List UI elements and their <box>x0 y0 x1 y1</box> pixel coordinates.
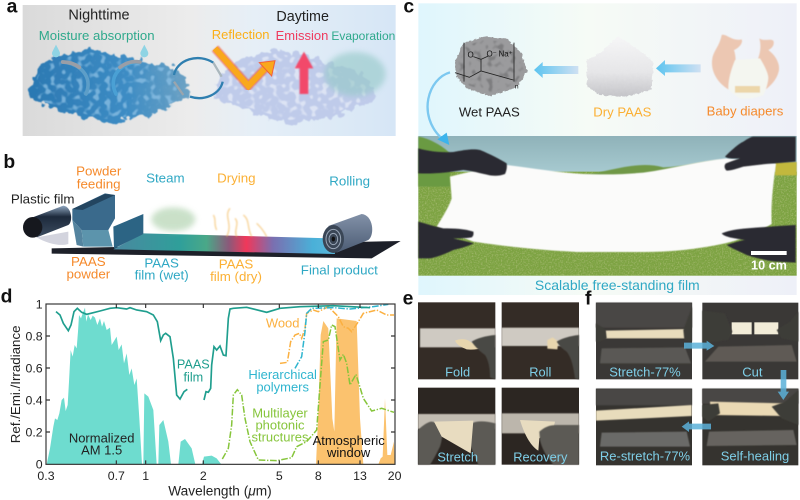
y axis labels: 0.6 <box>26 361 43 375</box>
panel letter f: f <box>585 289 592 310</box>
photo: self-healing <box>702 389 798 465</box>
photo: fold <box>418 302 495 380</box>
arrow: cut to self-healing <box>778 370 789 400</box>
label: hierarchical polymers: polymers <box>256 379 310 394</box>
panel f: self-healing demos <box>585 289 798 465</box>
white dry porous film <box>213 49 378 124</box>
icon: water drops <box>52 45 148 57</box>
label: final product: Final product <box>301 263 378 278</box>
blue wet porous film <box>29 48 191 123</box>
x axis labels: 8 <box>315 469 322 483</box>
y axis labels: 0.2 <box>26 425 43 439</box>
panel letter b: b <box>3 152 15 173</box>
curve: multilayer photonic structures <box>222 325 394 461</box>
scale bar <box>751 251 787 255</box>
icon: final roll <box>323 214 372 253</box>
photo: roll <box>502 302 579 380</box>
label: scalable film: Scalable free-standing film <box>535 277 700 293</box>
label: plastic film: Plastic film <box>11 191 75 206</box>
y axis labels: 0.4 <box>26 393 43 407</box>
photo: cut <box>702 303 798 380</box>
conveyor belt <box>52 241 401 258</box>
icon: wet PAAS with chemical structure: O <box>468 51 474 60</box>
label: PAAS film: PAAS <box>177 358 210 372</box>
label: moisture absorption: Moisture absorption <box>39 28 155 43</box>
panel e: mechanical demos <box>403 289 579 465</box>
x axis labels: 1 <box>142 469 149 483</box>
icon: powder hopper <box>72 193 115 247</box>
y axis labels <box>26 297 43 471</box>
panel a: moisture cycle <box>7 0 396 136</box>
arrows: moisture absorption <box>63 62 140 94</box>
label: normalized AM 1.5: Normalized <box>69 431 135 446</box>
photo: free-standing film <box>418 136 797 293</box>
label: dry PAAS: Dry PAAS <box>593 104 652 119</box>
label: steam: Steam <box>146 171 185 186</box>
label: wood: Wood <box>266 316 300 331</box>
photo: re-stretch 77% <box>596 389 692 465</box>
label: PAAS film dry: film (dry) <box>210 269 262 284</box>
heading: Nighttime: Nighttime <box>68 7 130 23</box>
icon: dry PAAS powder <box>587 36 653 97</box>
icon: plastic film roll <box>23 206 71 245</box>
arrow: self-healing to re-stretch <box>682 421 711 432</box>
arrow: reflection <box>215 48 275 86</box>
AM 1.5 solar spectrum <box>47 308 221 464</box>
atmospheric window fill <box>316 318 395 464</box>
x axis labels: 20 <box>388 469 402 483</box>
photo: stretch 77% <box>596 303 692 380</box>
x axis labels: 13 <box>353 469 367 483</box>
label: PAAS film wet: film (wet) <box>135 268 189 283</box>
arrow: dry to wet <box>534 62 578 78</box>
arrow: diapers to dry <box>656 60 701 76</box>
curve: hierarchical polymers <box>295 304 388 368</box>
divider wall <box>113 214 143 249</box>
curve: wood <box>280 307 394 363</box>
photo: recovery <box>502 388 579 465</box>
photo: self-healing: Self-healing <box>721 449 789 464</box>
panel d: spectral chart <box>1 286 402 499</box>
panel letter e: e <box>403 289 414 310</box>
label: normalized AM 1.5: AM 1.5 <box>81 443 122 458</box>
label: reflection: Reflection <box>212 27 270 42</box>
x axis labels: 5 <box>276 469 283 483</box>
label: PAAS powder: powder <box>66 266 111 281</box>
scale label: 10 cm <box>751 258 787 272</box>
y axis title: Ref./Emi./Irradiance <box>8 325 23 443</box>
panel b: roll-to-roll process <box>3 152 401 284</box>
label: multilayer photonic structures: Multilayer <box>252 406 308 421</box>
heading: Daytime: Daytime <box>276 9 329 25</box>
photo: stretch: Stretch <box>437 450 478 465</box>
panel c background <box>418 3 797 295</box>
label: powder feeding: feeding <box>77 176 121 191</box>
photo: roll: Roll <box>529 365 551 380</box>
label: PAAS film dry: PAAS <box>219 257 253 272</box>
photo: recovery: Recovery <box>513 450 568 465</box>
label: multilayer photonic structures: photonic <box>255 418 305 433</box>
icon: baby in diaper <box>712 35 779 99</box>
label: evaporation: Evaporation <box>331 29 395 43</box>
photo: re-stretch 77%: Re-stretch-77% <box>600 449 691 464</box>
drying wisps <box>213 208 267 237</box>
chart axes <box>46 304 395 464</box>
icon: wet PAAS with chemical structure <box>455 37 527 96</box>
label: PAAS powder: PAAS <box>71 254 106 269</box>
photo: cut: Cut <box>742 365 763 380</box>
curve: PAAS film <box>56 306 370 400</box>
label: hierarchical polymers: Hierarchical <box>248 367 317 382</box>
film gradient strip <box>113 233 335 254</box>
x axis labels <box>37 469 402 483</box>
panel letter d: d <box>1 286 12 307</box>
y axis labels: 0 <box>36 457 43 471</box>
arrow: curved wet PAAS to film <box>428 72 450 145</box>
evaporation haze <box>324 52 386 96</box>
x axis labels: 0.3 <box>37 469 55 483</box>
label: emission: Emission <box>276 28 328 43</box>
icon: wet PAAS with chemical structure: Na⁺ <box>498 50 513 59</box>
label: PAAS film wet: PAAS <box>144 255 179 270</box>
white film sheet <box>437 158 776 252</box>
steam cloud <box>151 207 195 231</box>
label: wet PAAS: Wet PAAS <box>459 104 520 119</box>
x axis labels: 2 <box>200 469 207 483</box>
y axis labels: 1 <box>36 297 43 311</box>
label: atmospheric window: Atmospheric <box>313 433 385 448</box>
arrow: emission <box>295 52 313 94</box>
label: atmospheric window: window <box>326 445 371 460</box>
label: powder feeding: Powder <box>76 164 122 179</box>
arrow: stretch to cut <box>684 341 714 351</box>
label: PAAS film: film <box>183 371 203 385</box>
icon: wet PAAS with chemical structure: n <box>515 84 519 91</box>
label: baby diapers: Baby diapers <box>707 103 784 118</box>
label: drying: Drying <box>217 170 256 185</box>
photo: fold: Fold <box>445 365 470 380</box>
arrow: cycle <box>174 58 223 98</box>
panel c: diaper recycling and film <box>403 0 797 295</box>
label: multilayer photonic structures: structures <box>251 430 309 445</box>
photo: stretch <box>418 388 495 465</box>
photo: stretch 77%: Stretch-77% <box>609 365 681 380</box>
label: rolling: Rolling <box>329 173 370 188</box>
x axis labels: 0.7 <box>108 469 125 483</box>
y axis labels: 0.8 <box>26 329 43 343</box>
x axis title: Wavelength (μm) <box>168 484 272 499</box>
icon: wet PAAS with chemical structure: O⁻ <box>486 50 497 59</box>
gloves <box>418 137 796 263</box>
